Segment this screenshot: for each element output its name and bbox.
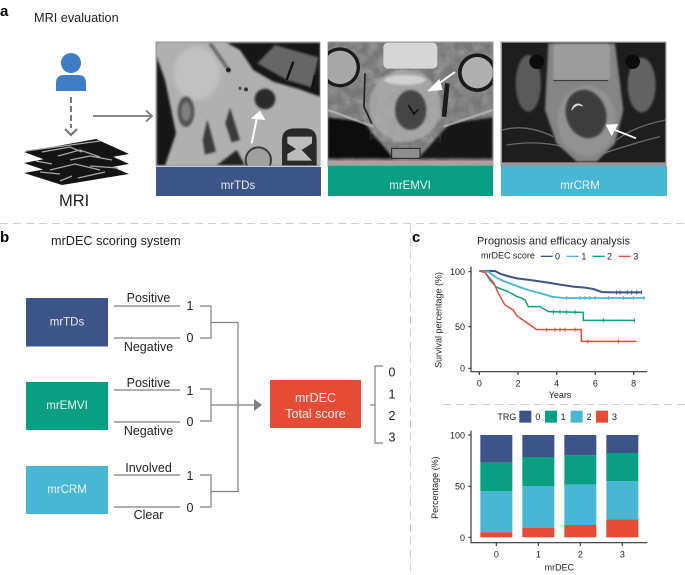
total score values: 1 bbox=[389, 388, 396, 402]
total score values: 2 bbox=[389, 409, 396, 423]
MRI card: mrCRM bbox=[500, 42, 667, 196]
bar legend: 0 bbox=[535, 412, 540, 422]
icon: MRI stack bbox=[24, 139, 129, 185]
total score values: 0 bbox=[389, 366, 396, 380]
category labels bbox=[124, 291, 173, 522]
panel c: prognosis and efficacy bbox=[412, 229, 647, 573]
panel letter a: a bbox=[0, 3, 9, 20]
scoring lines bbox=[114, 306, 383, 507]
curve: score 3 bbox=[479, 271, 637, 343]
axis labels: Years bbox=[549, 390, 572, 400]
bar axis labels: 3 bbox=[620, 549, 625, 559]
bar axis labels: 0 bbox=[460, 533, 465, 543]
axes bbox=[468, 267, 647, 375]
arrow: person to MRI bbox=[65, 97, 77, 135]
curve: score 2 bbox=[479, 271, 635, 322]
box: mrEMVI: mrEMVI bbox=[46, 400, 88, 412]
category labels: Positive bbox=[127, 376, 170, 390]
bar axis labels: 2 bbox=[578, 549, 583, 559]
panel letter b: b bbox=[0, 229, 9, 246]
binary scores: 0 bbox=[187, 331, 194, 345]
binary scores: 1 bbox=[187, 469, 194, 483]
axis labels: 2 bbox=[515, 378, 520, 388]
panel b: mrDEC scoring system bbox=[0, 229, 396, 522]
bar legend: 1 bbox=[561, 412, 566, 422]
box: mrDEC total score: Total score bbox=[285, 407, 346, 421]
bar axis labels: 50 bbox=[455, 482, 465, 492]
TRG stacked bar chart bbox=[430, 411, 647, 573]
survival legend: mrDEC score bbox=[481, 251, 535, 261]
bar: mrDEC 3 bbox=[606, 435, 638, 537]
box: mrCRM bbox=[26, 466, 108, 514]
total score values: 3 bbox=[389, 430, 396, 444]
axis labels: 50 bbox=[455, 322, 465, 332]
binary scores: 1 bbox=[187, 384, 194, 398]
bar axis labels: Percentage (%) bbox=[430, 456, 440, 519]
bar axis labels bbox=[430, 430, 625, 573]
MRI card: mrEMVI bbox=[320, 42, 497, 196]
axis labels: 8 bbox=[631, 378, 636, 388]
total score values bbox=[389, 366, 396, 444]
survival legend: 0 bbox=[555, 251, 560, 261]
bar: mrDEC 0 bbox=[480, 435, 512, 537]
bar axes bbox=[468, 431, 647, 546]
dividers bbox=[0, 224, 685, 575]
box: mrDEC total score bbox=[270, 380, 361, 428]
panel letter c: c bbox=[412, 229, 420, 246]
axis labels: 0 bbox=[460, 363, 465, 373]
axis labels: Survival percentage (%) bbox=[434, 272, 444, 368]
MRI card: mrEMVI: mrEMVI bbox=[389, 180, 431, 192]
box: mrEMVI bbox=[26, 382, 108, 430]
binary scores: 0 bbox=[187, 415, 194, 429]
heading: MRI evaluation: MRI evaluation bbox=[34, 11, 119, 25]
bar: mrDEC 2 bbox=[564, 435, 596, 537]
axis labels: 4 bbox=[554, 378, 559, 388]
category labels: Involved bbox=[125, 461, 172, 475]
MRI card: mrCRM: mrCRM bbox=[560, 180, 600, 192]
bar legend: 3 bbox=[612, 412, 617, 422]
curve: score 0 bbox=[479, 271, 642, 294]
bar legend: 2 bbox=[587, 412, 592, 422]
icon: person bbox=[56, 53, 86, 91]
binary scores bbox=[187, 299, 194, 515]
arrow: to total score bbox=[254, 399, 262, 411]
heading: mrDEC scoring system: mrDEC scoring system bbox=[51, 234, 181, 248]
box: mrTDs bbox=[26, 298, 108, 346]
bar legend: TRG bbox=[497, 412, 516, 422]
category labels: Negative bbox=[124, 424, 173, 438]
binary scores: 0 bbox=[187, 501, 194, 515]
survival chart bbox=[434, 235, 647, 400]
category labels: Negative bbox=[124, 340, 173, 354]
bar legend bbox=[497, 411, 617, 423]
category labels: Positive bbox=[127, 291, 170, 305]
survival legend: 1 bbox=[581, 251, 586, 261]
label: MRI: MRI bbox=[59, 192, 89, 210]
MRI card: mrTDs: mrTDs bbox=[221, 180, 255, 192]
bar axis labels: 1 bbox=[536, 549, 541, 559]
axis labels: 0 bbox=[477, 378, 482, 388]
axis labels bbox=[434, 267, 636, 400]
survival legend: 3 bbox=[633, 251, 638, 261]
axis labels: 6 bbox=[593, 378, 598, 388]
panel a: MRI evaluation bbox=[0, 3, 667, 210]
chart title: Prognosis and efficacy analysis bbox=[477, 235, 631, 247]
MRI card: mrTDs bbox=[156, 42, 321, 196]
box: mrDEC total score: mrDEC bbox=[295, 391, 336, 405]
arrow: to MRI images bbox=[93, 110, 152, 122]
bar axis labels: mrDEC bbox=[545, 563, 575, 573]
binary scores: 1 bbox=[187, 299, 194, 313]
category labels: Clear bbox=[134, 508, 163, 522]
survival legend bbox=[481, 251, 638, 261]
box: mrCRM: mrCRM bbox=[47, 484, 87, 496]
bar: mrDEC 1 bbox=[522, 435, 554, 537]
bar axis labels: 0 bbox=[494, 549, 499, 559]
curve: score 1 bbox=[479, 271, 645, 300]
bar axis labels: 100 bbox=[450, 430, 465, 440]
survival legend: 2 bbox=[607, 251, 612, 261]
box: mrTDs: mrTDs bbox=[50, 316, 84, 328]
axis labels: 100 bbox=[450, 267, 465, 277]
